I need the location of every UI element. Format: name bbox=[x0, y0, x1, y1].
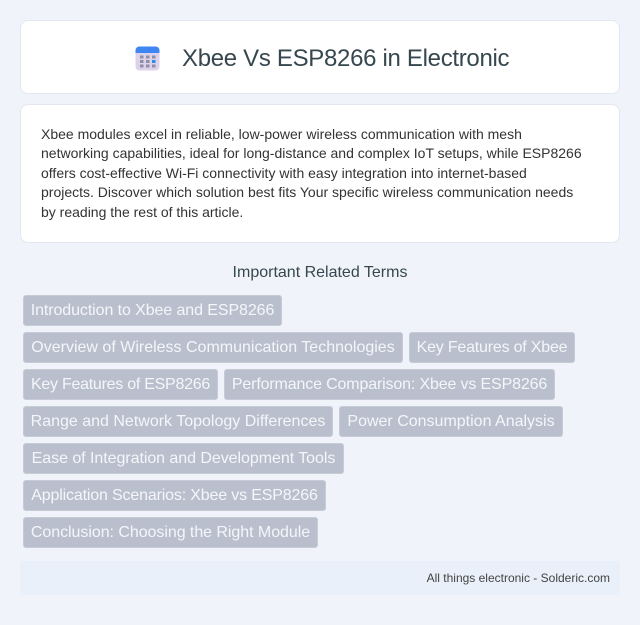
tag bbox=[23, 369, 218, 400]
heading: related terms: Important Related Terms bbox=[233, 264, 407, 281]
footer bar bbox=[20, 561, 620, 595]
tag: Application Scenarios: Xbee vs ESP8266 bbox=[31, 487, 318, 504]
tag: Ease of Integration and Development Tools bbox=[32, 450, 335, 467]
tag: Key Features of Xbee bbox=[417, 339, 567, 356]
intro text: networking capabilities, ideal for long-distance and complex IoT setups, while ESP8266 bbox=[41, 145, 582, 161]
tag: Key Features of ESP8266 bbox=[31, 376, 210, 393]
tag bbox=[409, 332, 575, 363]
intro text: offers cost-effective Wi-Fi connectivity with easy integration into internet-based bbox=[41, 165, 527, 181]
header card bbox=[20, 20, 620, 94]
tag: Introduction to Xbee and ESP8266 bbox=[31, 302, 274, 319]
tag: Overview of Wireless Communication Technologies bbox=[31, 339, 395, 356]
tag: Range and Network Topology Differences bbox=[31, 413, 325, 430]
tag bbox=[23, 295, 282, 326]
tag bbox=[23, 480, 326, 511]
tag: Power Consumption Analysis bbox=[347, 413, 555, 430]
tag: Performance Comparison: Xbee vs ESP8266 bbox=[232, 376, 547, 393]
intro text: projects. Discover which solution best fits Your specific wireless communication needs bbox=[41, 184, 573, 200]
icon: calendar grid bbox=[136, 46, 160, 70]
tag bbox=[23, 332, 403, 363]
intro text: Xbee modules excel in reliable, low-power wireless communication with mesh bbox=[41, 126, 522, 142]
tag bbox=[23, 443, 344, 474]
tag: Conclusion: Choosing the Right Module bbox=[31, 524, 310, 541]
title: Xbee Vs ESP8266 in Electronic bbox=[182, 45, 509, 72]
tag bbox=[23, 517, 318, 548]
intro text bbox=[41, 126, 582, 220]
tag bbox=[224, 369, 555, 400]
tag bbox=[23, 406, 333, 437]
tag list bbox=[23, 295, 575, 548]
tag bbox=[339, 406, 563, 437]
panel: intro paragraph bbox=[20, 104, 620, 243]
footer text: All things electronic - Solderic.com bbox=[427, 571, 610, 585]
intro text: by reading the rest of this article. bbox=[41, 204, 243, 220]
